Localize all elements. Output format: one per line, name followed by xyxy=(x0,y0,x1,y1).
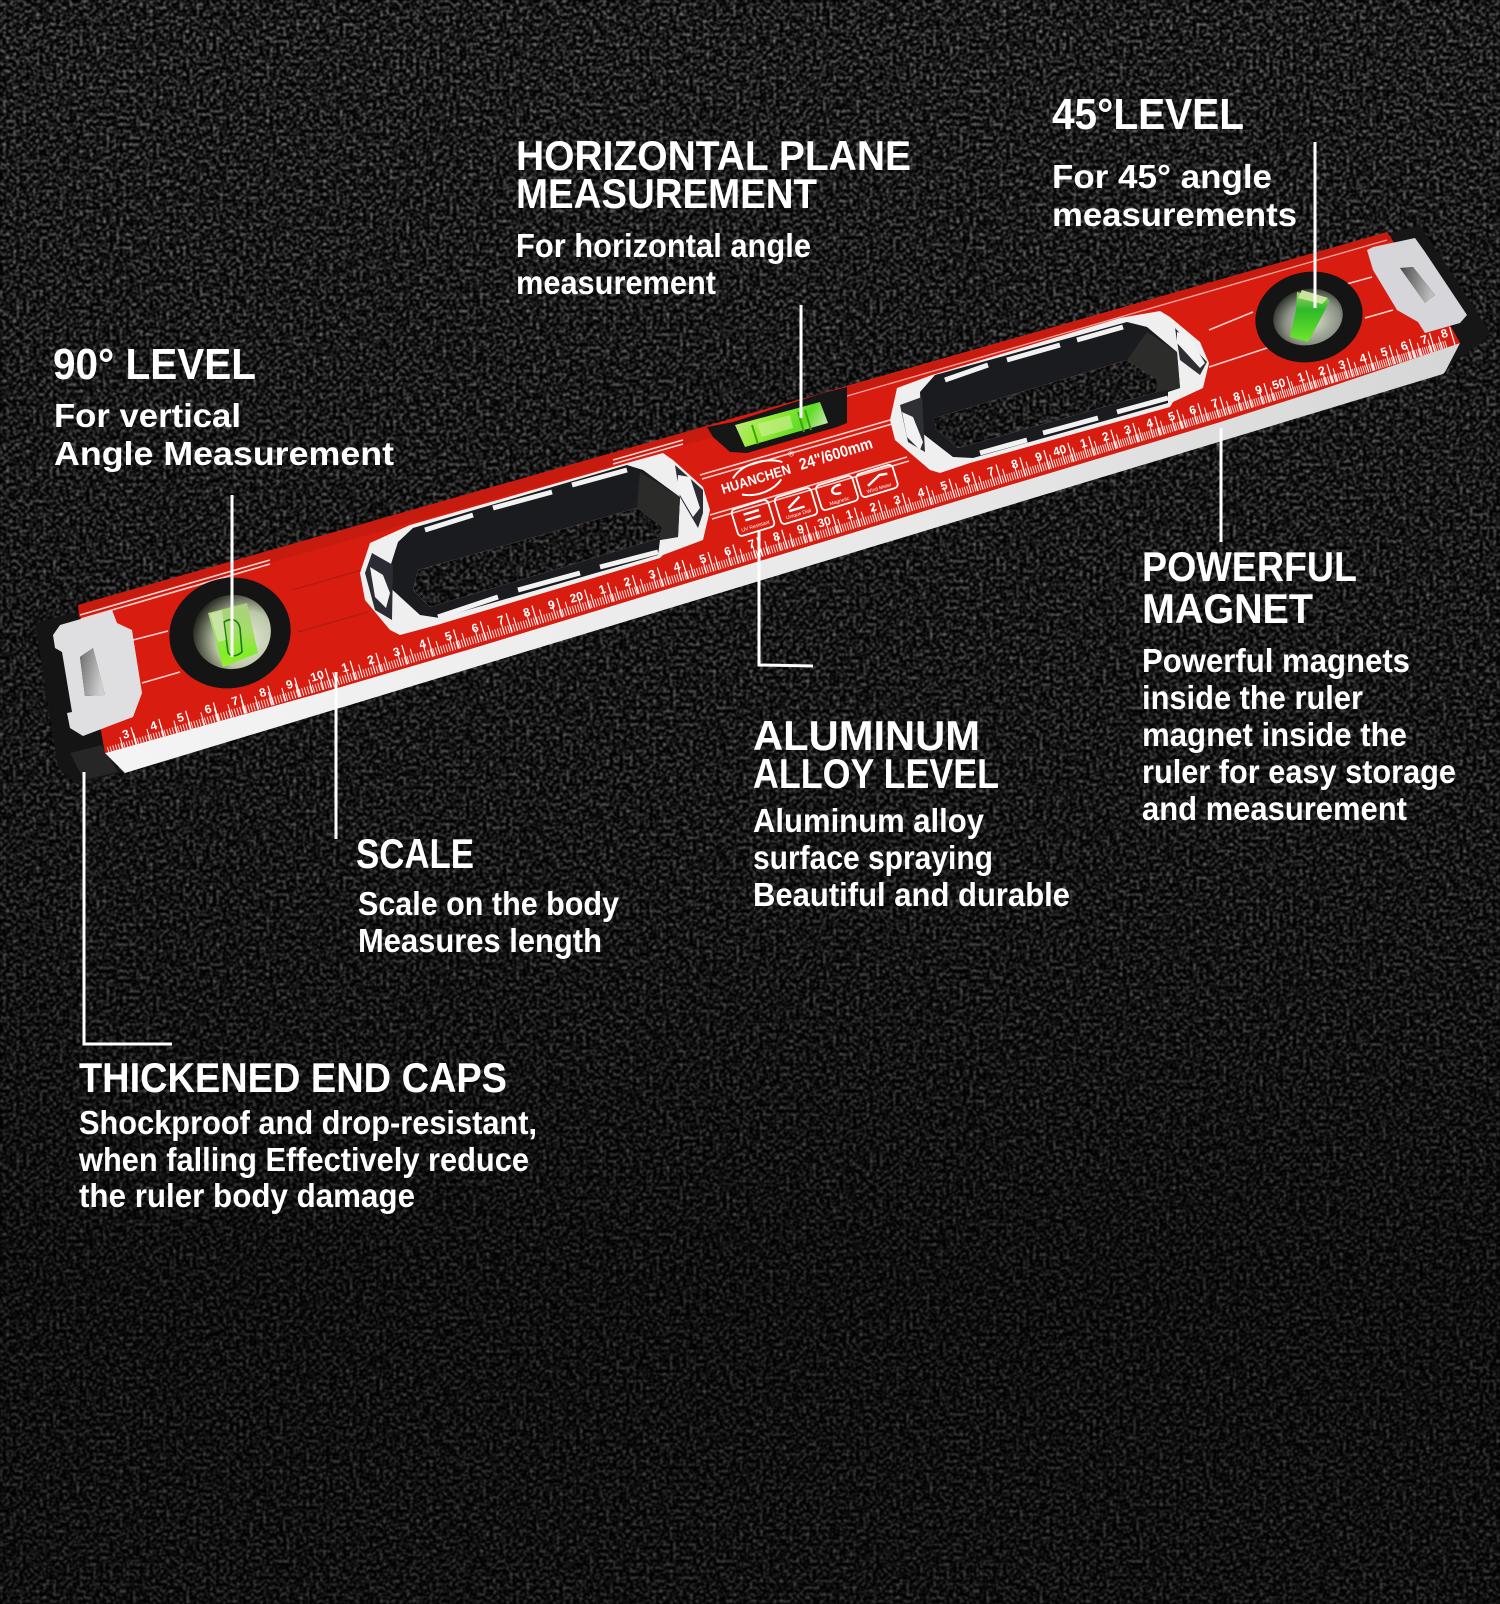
callout: powerful magnet: ruler for easy storage xyxy=(1142,753,1456,790)
callout: horizontal plane measurement: For horizontal angle xyxy=(516,227,811,264)
ruler scale: 6 xyxy=(1187,402,1198,418)
callout: scale xyxy=(356,830,620,959)
ruler scale: 10 xyxy=(309,667,326,685)
ruler scale: 4 xyxy=(417,636,428,652)
ruler scale: 2 xyxy=(622,574,633,590)
ruler scale: 7 xyxy=(746,536,757,552)
callout: 45 degree level: 45°LEVEL xyxy=(1052,90,1244,139)
right handle frame xyxy=(890,311,1209,473)
callout: horizontal plane measurement: measurement xyxy=(516,264,716,301)
right plate slot xyxy=(1400,267,1435,303)
ruler scale: 3 xyxy=(1337,357,1347,372)
ruler scale: 8 xyxy=(1231,389,1242,404)
ruler scale xyxy=(103,325,1455,755)
callout: 45 degree level: measurements xyxy=(1052,196,1297,233)
badge: wind meter xyxy=(855,464,899,498)
left handle frame xyxy=(360,453,710,635)
badge: UV resistant xyxy=(731,499,775,537)
ruler scale: 9 xyxy=(1033,449,1044,465)
left cap foot detail xyxy=(70,745,118,780)
callout: 90 degree level: For vertical xyxy=(54,397,241,434)
leader line: scale xyxy=(334,672,338,839)
badge: unique dial: Unique Dial xyxy=(785,508,812,521)
ruler scale: 7 xyxy=(1209,396,1220,411)
brand logo: HUANCHEN xyxy=(719,461,793,497)
red body with handle cut-outs xyxy=(78,232,1460,753)
callout: aluminum alloy level: ALUMINUM xyxy=(753,712,980,759)
ruler scale: 5 xyxy=(1166,409,1177,424)
leader line: 90 degree level xyxy=(230,495,234,657)
callout: powerful magnet xyxy=(1142,543,1456,827)
ruler scale: 1 xyxy=(1078,435,1089,451)
badge: wind meter: Wind Meter xyxy=(866,482,893,495)
left end plate xyxy=(53,610,142,736)
callout: powerful magnet: POWERFUL xyxy=(1142,543,1357,590)
ruler scale: 6 xyxy=(470,620,481,636)
callout: thickened end caps: when falling Effectively reduce xyxy=(78,1141,529,1178)
callout: powerful magnet: and measurement xyxy=(1142,790,1407,827)
callout: powerful magnet: MAGNET xyxy=(1142,585,1313,632)
ruler scale: 7 xyxy=(986,464,996,479)
ruler scale: 4 xyxy=(672,559,682,574)
ruler scale: 5 xyxy=(698,551,708,567)
callout: aluminum alloy level: ALLOY LEVEL xyxy=(753,750,999,797)
leader line: 45 degree level xyxy=(1314,142,1316,308)
ruler scale: 30 xyxy=(816,513,833,531)
ruler scale: 9 xyxy=(1253,382,1264,398)
ruler scale: 9 xyxy=(284,677,295,692)
right end plate xyxy=(1367,238,1467,333)
ruler scale: 9 xyxy=(795,521,806,537)
ruler scale: 2 xyxy=(868,499,879,515)
callout: thickened end caps: Shockproof and drop-resistant, xyxy=(79,1104,537,1141)
feature badges xyxy=(731,464,899,537)
callout: scale: Measures length xyxy=(358,922,602,959)
callout: horizontal plane measurement: MEASUREMENT xyxy=(516,170,817,217)
engraved body lines xyxy=(80,240,1393,683)
ruler scale: 3 xyxy=(121,726,131,742)
callout: 90 degree level: Angle Measurement xyxy=(54,435,394,472)
callout: aluminum alloy level: Aluminum alloy xyxy=(753,802,985,839)
badge: magnetic: Magnetic xyxy=(829,496,851,507)
badge: UV resistant: UV Resistant xyxy=(741,519,771,534)
ruler scale: 7 xyxy=(1419,332,1430,347)
ruler scale: 5 xyxy=(443,628,454,644)
leader line: end caps xyxy=(84,772,172,1044)
ruler scale: 6 xyxy=(1399,338,1410,353)
ruler scale: 4 xyxy=(148,718,159,733)
ruler scale: 1 xyxy=(1296,369,1306,385)
ruler scale: 50 xyxy=(1270,375,1287,393)
callout: thickened end caps xyxy=(78,1054,537,1214)
ruler scale: 3 xyxy=(647,567,658,582)
90 degree vial xyxy=(158,565,302,701)
ruler scale: 5 xyxy=(939,478,949,493)
ruler scale: 2 xyxy=(1100,429,1111,444)
ruler scale: 4 xyxy=(916,485,926,500)
callout: 90 degree level: 90° LEVEL xyxy=(53,340,256,389)
callout: powerful magnet: inside the ruler xyxy=(1142,679,1363,716)
ruler scale: 8 xyxy=(771,529,782,544)
callout: powerful magnet: Powerful magnets xyxy=(1142,642,1410,679)
ruler scale: 2 xyxy=(1317,363,1327,378)
left end cap xyxy=(35,612,120,783)
badge: magnetic xyxy=(815,475,859,511)
horizontal vial xyxy=(735,402,828,447)
brand logo: ® xyxy=(787,449,795,459)
ruler scale: 6 xyxy=(722,544,733,559)
size label: 24"/600mm xyxy=(797,435,875,474)
callout: horizontal plane measurement: HORIZONTAL PLANE xyxy=(516,132,911,179)
ruler scale: 3 xyxy=(391,644,402,660)
ruler scale: 8 xyxy=(521,605,532,620)
ruler scale: 6 xyxy=(962,471,972,486)
top rail shading xyxy=(78,232,1392,617)
ruler scale: 4 xyxy=(1144,415,1155,431)
callout: aluminum alloy level: Beautiful and durable xyxy=(753,876,1070,913)
ruler scale: 4 xyxy=(1358,351,1368,366)
callout: 45 degree level xyxy=(1052,90,1297,233)
leader line: powerful magnet xyxy=(1220,428,1222,542)
ruler scale: 8 xyxy=(257,685,268,700)
ruler scale: 9 xyxy=(546,597,557,613)
ruler scale: 8 xyxy=(1009,456,1020,472)
ruler scale: 5 xyxy=(175,710,186,725)
white aluminium lower face xyxy=(105,343,1460,773)
callout: thickened end caps: the ruler body damage xyxy=(79,1177,415,1214)
ruler scale: 20 xyxy=(568,589,585,606)
ruler scale: 7 xyxy=(496,612,506,628)
callout: scale: Scale on the body xyxy=(358,885,620,922)
leader line: aluminum alloy xyxy=(759,530,813,666)
brand logo xyxy=(716,449,803,504)
left plate slot xyxy=(80,648,105,696)
callout: 90 degree level xyxy=(53,340,394,472)
callout: 45 degree level: For 45° angle xyxy=(1052,158,1272,195)
45 degree vial xyxy=(1247,262,1371,372)
callout: aluminum alloy level xyxy=(753,712,1070,913)
leader line: horizontal plane xyxy=(800,305,802,418)
callout: thickened end caps: THICKENED END CAPS xyxy=(79,1054,507,1101)
right end cap xyxy=(1390,225,1490,375)
callout: horizontal plane measurement xyxy=(516,132,911,301)
badge: unique dial xyxy=(774,487,818,525)
ruler scale: 7 xyxy=(230,693,240,709)
callout: aluminum alloy level: surface spraying xyxy=(753,839,993,876)
ruler scale: 5 xyxy=(1379,344,1390,360)
callout: powerful magnet: magnet inside the xyxy=(1142,716,1407,753)
spirit level tool xyxy=(35,225,1490,783)
horizontal vial housing xyxy=(707,387,847,453)
callout: scale: SCALE xyxy=(356,830,474,877)
ruler scale: 8 xyxy=(1439,326,1450,341)
ruler scale: 1 xyxy=(340,660,350,675)
ruler scale: 1 xyxy=(597,582,608,597)
ruler scale: 3 xyxy=(1122,422,1133,438)
ruler scale: 6 xyxy=(203,701,214,717)
ruler scale: 3 xyxy=(892,492,903,508)
ruler scale: 40 xyxy=(1051,442,1068,459)
ruler scale: 1 xyxy=(844,507,855,522)
ruler scale: 2 xyxy=(366,652,376,667)
